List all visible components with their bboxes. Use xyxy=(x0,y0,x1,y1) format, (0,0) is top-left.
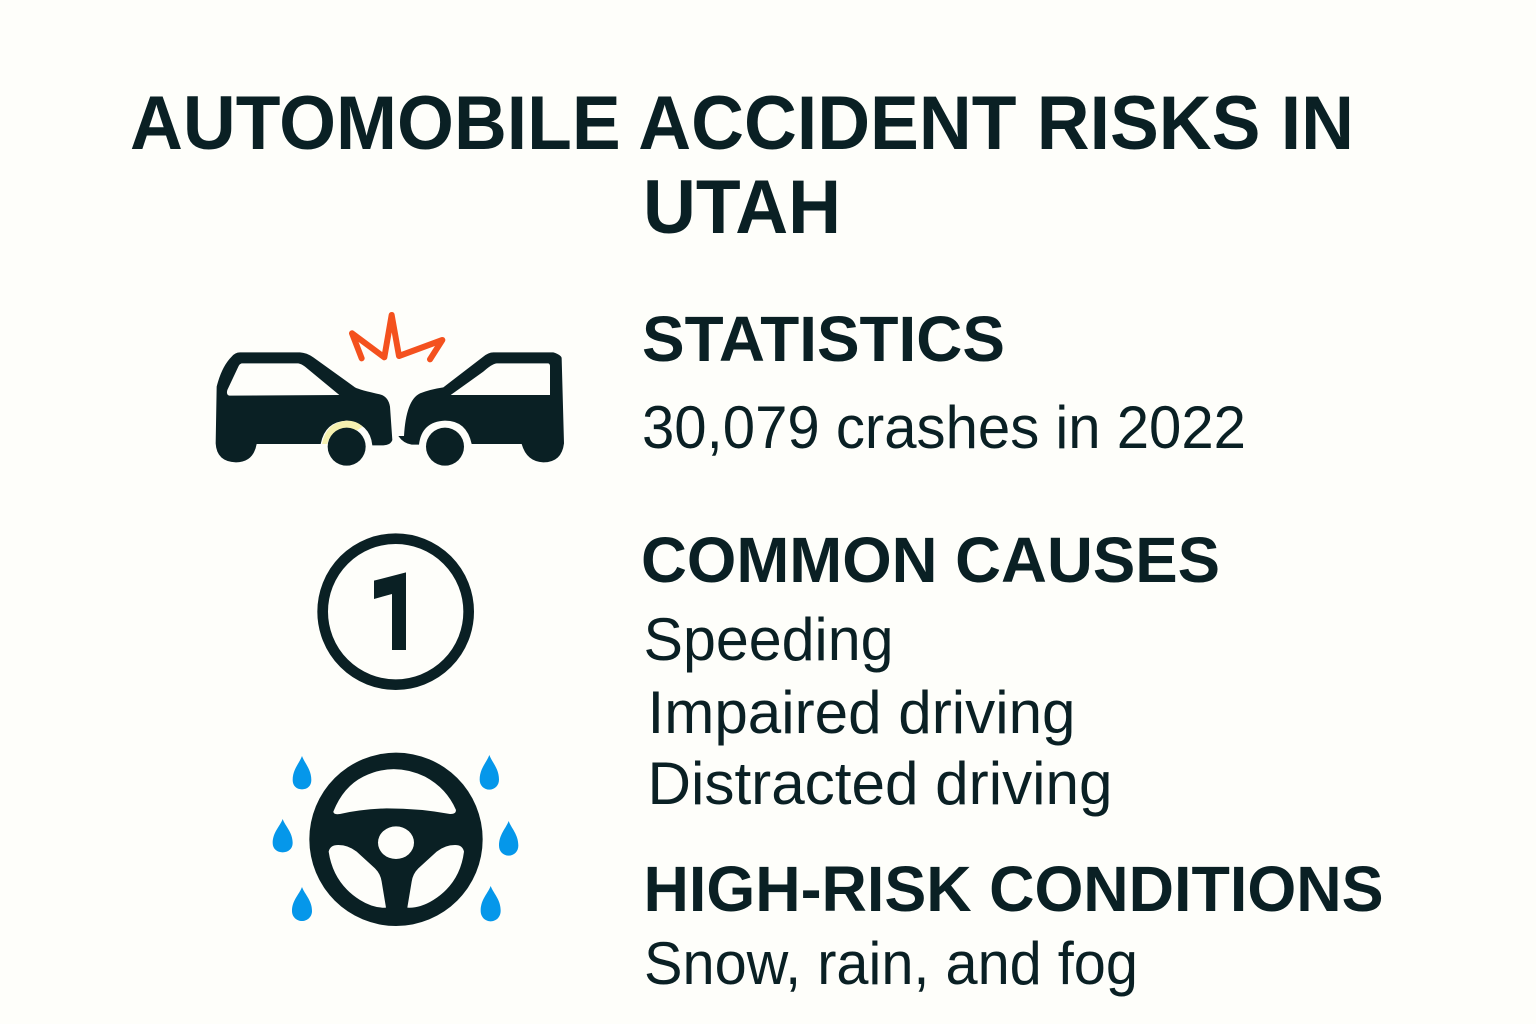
title xyxy=(130,81,1354,250)
icon: right car xyxy=(398,352,564,466)
heading: statistics: STATISTICS xyxy=(642,303,1005,375)
icon: steering wheel with rain xyxy=(273,753,518,926)
text: impaired driving: Impaired driving xyxy=(648,679,1076,746)
section: high-risk conditions xyxy=(644,853,1384,997)
heading: common causes: COMMON CAUSES xyxy=(641,524,1220,596)
icon: impact spark xyxy=(352,315,442,359)
icon: left car xyxy=(216,352,392,466)
icon: steering wheel xyxy=(309,753,483,926)
icon: rain drops xyxy=(273,755,518,921)
section: common causes xyxy=(641,524,1220,817)
text: distracted driving: Distracted driving xyxy=(648,750,1112,817)
heading: high-risk conditions: HIGH-RISK CONDITIONS xyxy=(644,853,1384,925)
icon: number one in circle xyxy=(323,539,469,685)
text: weather conditions: Snow, rain, and fog xyxy=(644,930,1138,997)
title: UTAH xyxy=(643,165,841,250)
icon: car crash xyxy=(216,315,564,466)
text: crash count: 30,079 crashes in 2022 xyxy=(642,394,1246,461)
text: speeding: Speeding xyxy=(644,606,894,673)
section: statistics xyxy=(642,303,1246,461)
title: AUTOMOBILE ACCIDENT RISKS IN xyxy=(130,81,1354,166)
